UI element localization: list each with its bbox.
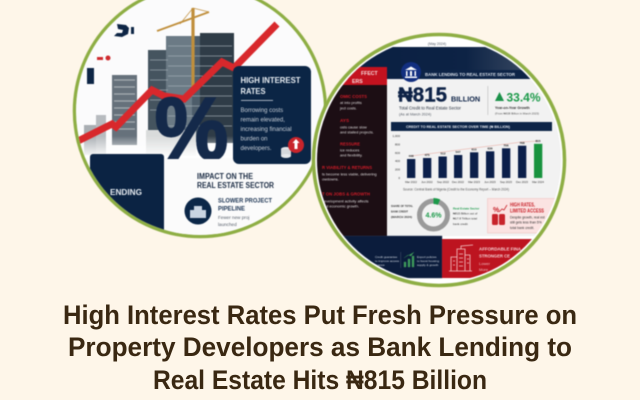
clipped description: Fewer new proj [218, 215, 249, 220]
value labels: 610 [471, 148, 477, 152]
clipped headline fragments [87, 24, 134, 84]
donut chart: share of bank credit: ₦815 Billion out of [453, 212, 478, 216]
bars [407, 144, 542, 178]
effect list: ts become less viable, delivering [322, 172, 377, 176]
chart title: CREDIT TO REAL ESTATE SECTOR OVER TIME (₦ BILLION) [406, 125, 511, 129]
x axis [404, 180, 544, 184]
icon: coins and up arrow [281, 137, 304, 158]
donut chart: share of bank credit: BANK CREDIT [391, 210, 408, 214]
y axis: 1,000 [392, 134, 400, 138]
stat: total credit: (As at March 2024) [399, 112, 432, 116]
value labels: 448 [408, 154, 414, 158]
card: high interest rates: increasing financial [240, 127, 292, 133]
clipped label: ENDING [110, 188, 142, 197]
title [63, 300, 577, 395]
stat: total credit: Total Credit to Real Estate Sector [399, 106, 462, 110]
x axis: Jun 2023 [484, 180, 496, 184]
panel: affordable finance [442, 239, 572, 278]
section ribbon: BANK LENDING TO REAL ESTATE SECTOR [425, 72, 515, 77]
y axis: 800 [395, 142, 400, 146]
effect list: OMIC COSTS [340, 94, 367, 99]
effect list: and stalled projects. [340, 130, 374, 134]
stat: year on year growth: 33.4% [506, 90, 541, 104]
panel: left circle image [70, 0, 334, 240]
value labels: 475 [424, 153, 430, 157]
value labels: 547 [455, 150, 461, 154]
main light panel [387, 79, 572, 236]
card: high interest rates [233, 66, 311, 164]
effect list: development activity affects [322, 200, 369, 204]
stat: total credit: ₦815 [398, 84, 447, 106]
source note: Source: Central Bank of Nigeria (Credit to the Economy Report – March 2024) [403, 188, 509, 192]
panel: policy strip: Export policies [417, 255, 437, 259]
callout: high rates, limited access: LIMITED ACCESS [510, 208, 545, 214]
stat: total credit: BILLION [451, 94, 480, 104]
value labels: 815 [535, 139, 541, 143]
card: high interest rates: RATES [240, 86, 266, 96]
donut chart: share of bank credit: ₦17.8 Trillion total [453, 216, 477, 220]
x axis: Jun 2022 [421, 180, 433, 184]
effect list: and flexibility. [340, 154, 363, 158]
effect list: at into profits [340, 101, 362, 105]
clipped red marks [97, 56, 110, 60]
slower project pipeline: PIPELINE [218, 206, 246, 212]
x axis: Dec 2023 [516, 180, 528, 184]
impact heading: IMPACT ON THE [197, 172, 254, 181]
value labels: 636 [487, 146, 493, 150]
card: high interest rates: remain elevated, [240, 118, 285, 124]
stat: year on year growth: (From ₦608 Billion in March 2023) [495, 112, 539, 116]
panel: policy strip: finance [375, 263, 385, 267]
slower project pipeline [218, 198, 272, 212]
top navy banner [348, 46, 530, 80]
panel: affordable finance: Lower [479, 261, 491, 266]
card: high interest rates: Borrowing costs [240, 108, 283, 114]
x axis: Mar 2023 [468, 180, 480, 184]
card: high interest rates: developers. [240, 146, 272, 152]
icon: construction crane [157, 8, 209, 92]
panel: affordable finance: More [479, 267, 489, 272]
red rising arrow [78, 24, 277, 141]
card: high interest rates: burden on [240, 136, 268, 142]
title: Property Developers as Bank Lending to [68, 332, 572, 362]
donut chart: share of bank credit: bank credit [453, 222, 468, 226]
panel: policy strip [343, 235, 443, 279]
icon: buildings [184, 198, 212, 224]
icon: bank [401, 62, 421, 82]
lower left navy panel [90, 154, 164, 234]
donut chart: share of bank credit [391, 201, 480, 229]
impact heading: REAL ESTATE SECTOR [197, 181, 274, 190]
y axis: 600 [395, 151, 400, 155]
effect list: AYS [340, 118, 349, 123]
callout: high rates, limited access: HIGH RATES, [510, 202, 535, 208]
panel: dark effects column [310, 67, 387, 236]
callout: high rates, limited access: still gets less than 5% [510, 220, 542, 224]
x axis: Mar 2022 [405, 180, 417, 184]
title: Real Estate Hits ₦815 Billion [153, 365, 487, 395]
effect list: ice reduces [340, 148, 360, 152]
icon: percent and coins: % [493, 207, 500, 214]
percent symbol: % [155, 81, 228, 178]
red column header: FFECT [361, 71, 379, 77]
value labels: 768 [519, 141, 525, 145]
x axis: Sep 2022 [437, 180, 449, 184]
x axis: Sep 2023 [500, 180, 512, 184]
stat: year on year growth [495, 90, 541, 116]
effect list: and economic growth. [322, 204, 359, 208]
slower project pipeline: SLOWER PROJECT [218, 198, 272, 204]
panel: impact on the real estate sector [164, 158, 312, 234]
panel: affordable finance: STRONGER CE [479, 254, 511, 260]
trend line [411, 141, 538, 156]
panel: policy strip: Credit guarantee [375, 255, 398, 259]
bar chart [392, 134, 544, 184]
effect list: T ON JOBS & GROWTH [322, 192, 370, 198]
background skyline [84, 32, 235, 158]
divider [487, 86, 488, 115]
stat: year on year growth: Year-on-Year Growth [495, 106, 530, 110]
donut chart: share of bank credit: 4.6% [426, 212, 442, 220]
icon: growth chart [404, 252, 414, 267]
panel: policy strip: supply & growth [417, 263, 439, 267]
section ribbon [424, 70, 530, 80]
x axis: Dec 2022 [452, 180, 464, 184]
icon: city buildings [449, 245, 473, 271]
red column header [342, 66, 388, 86]
panel: policy strip: to boost housing [417, 259, 439, 263]
y axis: 400 [395, 159, 400, 163]
panel: policy strip: to improve access [375, 259, 400, 263]
value labels: 706 [503, 144, 509, 148]
date caption: (May 2024) [428, 42, 446, 46]
stat: total credit [398, 84, 480, 116]
red column header: ERS [352, 79, 363, 85]
callout: high rates, limited access: total bank credit. [510, 226, 534, 230]
donut chart: share of bank credit: Real Estate Sector [453, 206, 480, 210]
value labels [408, 139, 541, 158]
donut chart: share of bank credit: (MARCH 2024) [391, 215, 412, 219]
value labels: 512 [440, 152, 446, 156]
chart title [391, 122, 552, 131]
effect list: R VIABILITY & RETURNS [322, 165, 373, 171]
x axis: Mar 2024 [532, 180, 544, 184]
effect list: ject costs. [339, 106, 357, 110]
clipped description: launched [218, 222, 237, 227]
effect list: owdowns. [322, 178, 339, 182]
title: High Interest Rates Put Fresh Pressure on [63, 300, 577, 330]
y axis [392, 134, 400, 180]
panel: right circle image [310, 30, 572, 290]
effect list [322, 94, 377, 208]
y axis: 0 [398, 176, 400, 180]
impact heading [197, 172, 274, 190]
donut chart: share of bank credit: SHARE OF TOTAL [391, 204, 413, 208]
callout: high rates, limited access [488, 198, 568, 233]
effect list: osts cause slow [340, 126, 367, 130]
effect list: RESSURE [340, 142, 360, 146]
card: high interest rates: HIGH INTEREST [240, 75, 301, 85]
callout: high rates, limited access: Despite growth, real est [510, 216, 545, 220]
panel: affordable finance: AFFORDABLE FINA [479, 246, 521, 252]
y axis: 200 [395, 168, 400, 172]
